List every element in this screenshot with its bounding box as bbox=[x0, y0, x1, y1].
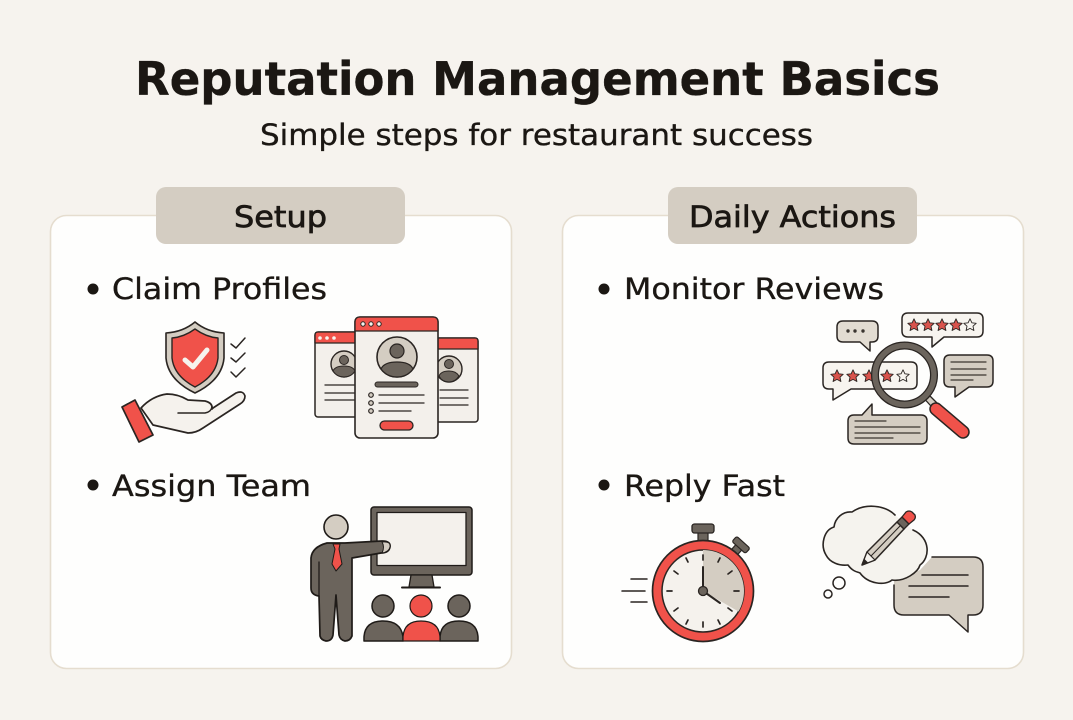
icon: reviews under magnifier bbox=[823, 313, 993, 444]
item: reply fast: Reply Fast bbox=[624, 469, 785, 503]
item: assign team: Assign Team bbox=[112, 469, 311, 503]
subtitle: Simple steps for restaurant success bbox=[260, 118, 813, 152]
icon: profile cards bbox=[315, 317, 478, 438]
icon: shield on hand bbox=[122, 322, 245, 442]
daily actions heading bbox=[668, 187, 917, 244]
daily actions heading: Daily Actions bbox=[689, 200, 896, 234]
item: monitor reviews: Monitor Reviews bbox=[624, 272, 884, 306]
panel: setup bbox=[50, 187, 512, 668]
icon: thought cloud with pencil and speech bubble bbox=[823, 506, 983, 632]
setup heading: Setup bbox=[234, 200, 327, 234]
setup card bbox=[50, 216, 512, 668]
item: claim profiles: Claim Profiles bbox=[112, 272, 327, 306]
daily actions card bbox=[562, 216, 1024, 668]
icon: stopwatch bbox=[622, 524, 754, 642]
panel: daily actions bbox=[562, 187, 1024, 668]
icon: presenter and team bbox=[311, 507, 478, 641]
setup heading bbox=[156, 187, 405, 244]
title: Reputation Management Basics bbox=[135, 52, 940, 106]
